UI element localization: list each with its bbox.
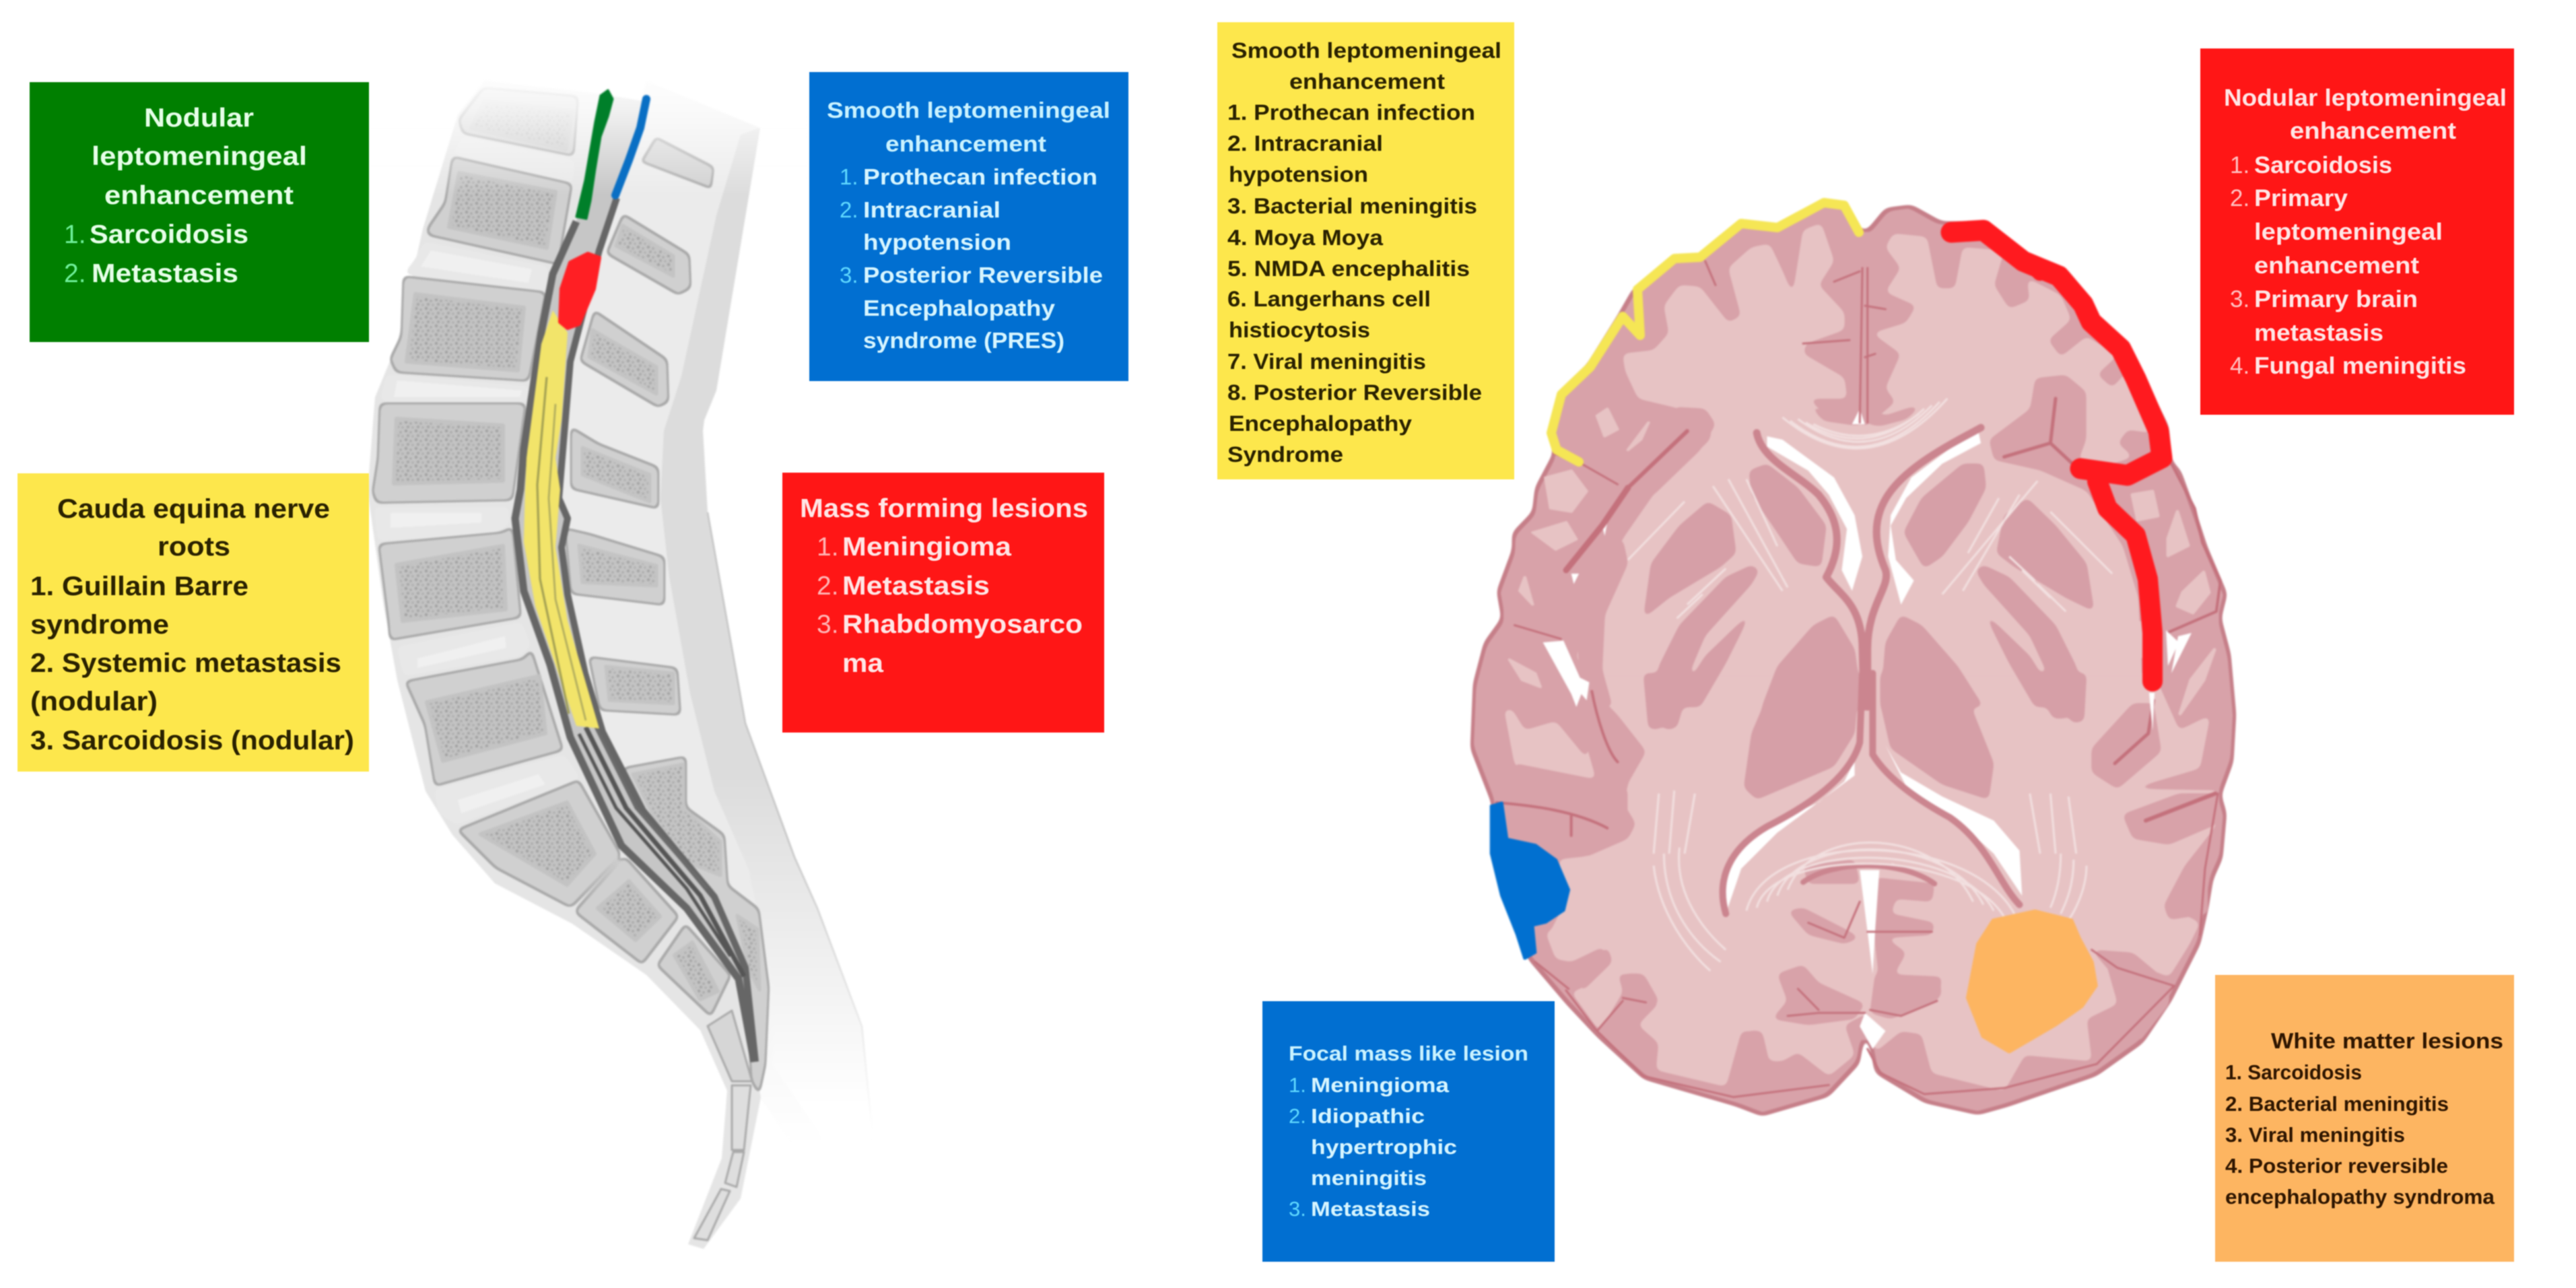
- heading: roots: [158, 532, 230, 562]
- heading: Cauda equina nerve: [57, 494, 330, 524]
- list: 2.: [1289, 1104, 1306, 1128]
- list: Intracranial: [863, 197, 1001, 222]
- right outer gyri white matter spots: [2128, 492, 2214, 714]
- heading: [1231, 38, 1501, 94]
- list: 2.: [2230, 185, 2249, 211]
- list: Metastasis: [842, 572, 990, 601]
- intervertebral discs: [374, 137, 580, 825]
- list: 2. Bacterial meningitis: [2225, 1092, 2449, 1116]
- list: enhancement: [2254, 252, 2419, 279]
- list: 7. Viral meningitis: [1227, 349, 1426, 374]
- list: Prothecan infection: [863, 164, 1097, 189]
- panel: mass forming lesions: [782, 473, 1104, 733]
- sacral tip and coccyx: [694, 1011, 752, 1240]
- list: [817, 533, 1083, 678]
- list: 3.: [817, 610, 839, 639]
- lower white matter: [1504, 673, 2218, 1091]
- heading: [57, 494, 330, 562]
- list: 3.: [1289, 1197, 1306, 1221]
- lateral ventricles and sulcal spaces, upper: [1543, 409, 1981, 707]
- mass lesion, red: [560, 254, 599, 328]
- spinal canal: [515, 94, 755, 1062]
- vertebral bodies: [372, 87, 732, 1018]
- heading: Nodular: [144, 104, 254, 133]
- posterior vertebral elements: [564, 134, 770, 1097]
- fibres, lower: [1654, 790, 2087, 971]
- list: 3. Bacterial meningitis: [1227, 194, 1477, 218]
- list: Idiopathic: [1311, 1104, 1425, 1128]
- cancellous bone texture: [394, 101, 718, 999]
- soft tissue behind the spine: [559, 81, 873, 1192]
- nodular enhancement strip, green: [576, 90, 613, 219]
- white matter spots in outer gyri: [1510, 409, 1648, 687]
- list: 2.: [64, 259, 86, 288]
- heading: leptomeningeal: [92, 142, 307, 171]
- corpus callosum and capsule fibres, upper: [1628, 399, 2112, 618]
- focal mass lesion blue: [1491, 803, 1569, 959]
- list: 1.: [817, 533, 839, 562]
- list: Meningioma: [1311, 1073, 1450, 1097]
- list: 6. Langerhans cell: [1227, 287, 1431, 311]
- heading: Mass forming lesions: [800, 494, 1088, 523]
- heading: White matter lesions: [2271, 1029, 2503, 1053]
- list: Posterior Reversible: [863, 263, 1103, 287]
- list: [2230, 152, 2466, 379]
- list: Primary brain: [2254, 286, 2418, 312]
- list: hypotension: [863, 230, 1011, 255]
- heading: enhancement: [1289, 69, 1445, 94]
- list: ma: [842, 649, 883, 678]
- list: encephalopathy syndroma: [2225, 1185, 2495, 1209]
- brain outline with cortex: [1470, 201, 2236, 1116]
- list: 1. Prothecan infection: [1227, 100, 1475, 125]
- heading: enhancement: [2290, 118, 2456, 144]
- list: 4.: [2230, 353, 2249, 379]
- list: Rhabdomyosarco: [842, 610, 1083, 639]
- list: 2. Intracranial: [1227, 131, 1383, 156]
- lower cortical folds: [1510, 691, 2218, 1076]
- list: 1.: [64, 220, 86, 249]
- list: (nodular): [30, 687, 158, 716]
- list: 3. Viral meningitis: [2225, 1123, 2405, 1147]
- heading: Focal mass like lesion: [1289, 1042, 1528, 1065]
- list: [1227, 100, 1482, 467]
- brain axial section illustration: [1470, 201, 2236, 1116]
- list: leptomeningeal: [2254, 219, 2443, 245]
- list: 1.: [1289, 1073, 1306, 1097]
- list: 4. Posterior reversible: [2225, 1154, 2448, 1178]
- list: hypertrophic: [1311, 1135, 1457, 1159]
- panel: nodular leptomeningeal enhancement (spine): [30, 82, 369, 342]
- top fade of the illustration: [364, 40, 808, 202]
- panel: white matter lesions: [2215, 975, 2514, 1262]
- panel: cauda equina nerve roots: [18, 473, 369, 772]
- list: 2.: [840, 197, 858, 222]
- heading: Smooth leptomeningeal: [1231, 38, 1501, 63]
- nodular enhancement red outline: [1951, 230, 2162, 681]
- list: Primary: [2254, 185, 2348, 211]
- list: [30, 572, 354, 755]
- list: 3.: [2230, 286, 2249, 312]
- upper white matter: [1576, 224, 2151, 707]
- list: [1289, 1073, 1457, 1221]
- list: 3. Sarcoidosis (nodular): [30, 726, 354, 755]
- list: 1.: [840, 164, 858, 189]
- list: hypotension: [1229, 162, 1368, 187]
- list: Metastasis: [92, 259, 238, 288]
- anterior ligament outline: [368, 81, 761, 1249]
- sulcal gaps on the right: [2149, 630, 2192, 731]
- list: 8. Posterior Reversible: [1227, 380, 1482, 405]
- list: Sarcoidosis: [90, 220, 248, 249]
- list: Sarcoidosis: [2254, 152, 2392, 178]
- list: syndrome: [30, 610, 169, 640]
- heading: [827, 98, 1110, 156]
- list: [2225, 1060, 2495, 1209]
- ventricle walls and sulci, upper: [1514, 261, 2221, 707]
- heading: Nodular leptomeningeal: [2224, 85, 2507, 111]
- list: Metastasis: [1311, 1197, 1430, 1221]
- heading: enhancement: [885, 131, 1046, 156]
- heading: Smooth leptomeningeal: [827, 98, 1110, 123]
- panel: nodular leptomeningeal enhancement (brain): [2200, 48, 2514, 415]
- panel: smooth leptomeningeal enhancement (spine): [809, 72, 1128, 381]
- list: Encephalopathy: [1229, 411, 1412, 436]
- list: 2. Systemic metastasis: [30, 648, 341, 678]
- list: [64, 220, 248, 288]
- list: Syndrome: [1227, 442, 1343, 467]
- smooth enhancement strip, blue: [615, 99, 646, 195]
- lateral ventricles and sulcal spaces, lower: [1571, 673, 2022, 1049]
- smooth enhancement yellow outline: [1551, 203, 1859, 462]
- spine anatomy illustration: [364, 40, 873, 1249]
- upper cortical folds: [1576, 402, 1922, 707]
- list: 1. Guillain Barre: [30, 572, 248, 601]
- heading: [92, 104, 307, 210]
- heading: [2224, 85, 2507, 144]
- cauda equina nerve roots highlighted yellow: [524, 310, 599, 728]
- list: 5. NMDA encephalitis: [1227, 257, 1470, 281]
- panel: focal mass like lesion: [1262, 1001, 1555, 1262]
- list: meningitis: [1311, 1166, 1427, 1190]
- disc highlights: [391, 250, 545, 813]
- list: 3.: [840, 263, 858, 287]
- white matter lesion orange: [1968, 911, 2096, 1052]
- list: Meningioma: [842, 533, 1011, 562]
- list: syndrome (PRES): [863, 328, 1064, 353]
- list: 1. Sarcoidosis: [2225, 1060, 2362, 1084]
- list: histiocytosis: [1229, 318, 1370, 342]
- heading: enhancement: [104, 181, 294, 210]
- deep nuclei: [1643, 464, 2094, 799]
- list: Encephalopathy: [863, 296, 1056, 320]
- panel: smooth leptomeningeal enhancement (brain): [1217, 22, 1514, 479]
- list: Fungal meningitis: [2254, 353, 2466, 379]
- list: metastasis: [2254, 320, 2383, 346]
- ventricle walls and sulci, lower: [1497, 673, 2218, 1097]
- list: [840, 164, 1103, 353]
- list: 4. Moya Moya: [1227, 226, 1383, 250]
- list: 2.: [817, 572, 839, 601]
- list: 1.: [2230, 152, 2249, 178]
- posterior bone texture: [579, 226, 759, 990]
